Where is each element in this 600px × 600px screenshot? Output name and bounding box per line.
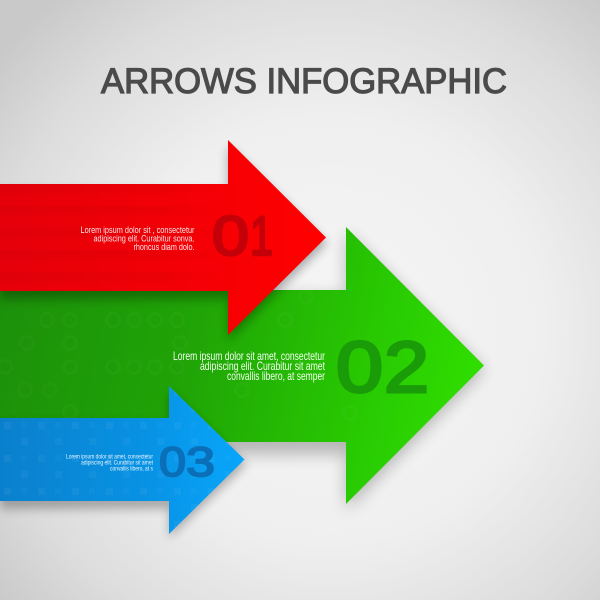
pattern: stripes bbox=[0, 184, 228, 291]
number 01: 1 bbox=[250, 204, 273, 267]
number 03: 3 bbox=[186, 438, 215, 485]
number 01: 0 bbox=[212, 204, 249, 267]
text: green description: adipiscing elit. Curabitur sit amet bbox=[200, 359, 325, 373]
text: red description: Lorem ipsum dolor sit , consectetur bbox=[80, 225, 194, 235]
text: green description: convallis libero, at semper bbox=[227, 369, 325, 383]
arrow 02: green bbox=[0, 227, 484, 510]
text: red description: adipiscing elit. Curabitur sonva. bbox=[94, 234, 194, 244]
number 02: 2 bbox=[384, 328, 429, 408]
number 02: 0 bbox=[336, 328, 383, 408]
text: green description: Lorem ipsum dolor sit amet, consectetur bbox=[173, 349, 325, 363]
text: red description: rhoncus diam dolo. bbox=[134, 242, 194, 252]
text: blue description: Lorem ipsum dolor sit amet, consectetur bbox=[66, 454, 153, 460]
number 02 bbox=[336, 328, 429, 408]
number 03: 0 bbox=[159, 438, 186, 485]
pattern: squares bbox=[0, 386, 244, 534]
number 01 bbox=[212, 204, 273, 267]
arrow 01: red bbox=[0, 140, 327, 341]
text: blue description: adipiscing elit. Curabitur sit amet bbox=[81, 460, 153, 466]
title: ARROWS INFOGRAPHIC bbox=[101, 62, 507, 101]
pattern: rings bbox=[0, 290, 356, 420]
arrow 03: blue bbox=[0, 386, 246, 538]
number 03 bbox=[159, 438, 215, 485]
text: blue description: convallis libero, at s bbox=[110, 466, 153, 472]
